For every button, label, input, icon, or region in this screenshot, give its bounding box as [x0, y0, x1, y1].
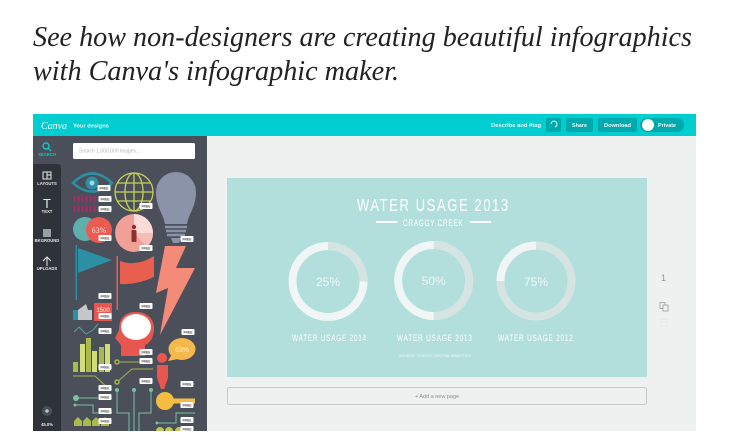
- free badges: FREE: [141, 204, 151, 208]
- icon: venn percent: [73, 217, 112, 243]
- free badges: FREE: [141, 304, 151, 308]
- sidebar tabs: TEXT: [42, 209, 53, 214]
- top toolbar: Your designs: [73, 124, 109, 130]
- free badges: FREE: [100, 197, 110, 201]
- top toolbar: Canva: [41, 120, 67, 132]
- free badges: FREE: [100, 395, 110, 399]
- search box: [73, 143, 195, 159]
- bar chart: [73, 338, 110, 372]
- icon: venn percent: 63%: [92, 226, 107, 235]
- icon: teal flag: [76, 245, 112, 300]
- donut labels: WATER USAGE 2012: [498, 333, 573, 343]
- icon: red counter: [94, 303, 112, 321]
- free badges: FREE: [182, 382, 192, 386]
- icon: red counter: 1500: [96, 308, 110, 314]
- heading text: with Canva's infographic maker.: [33, 56, 399, 87]
- free badges: FREE: [100, 207, 110, 211]
- icon: head silhouette: [115, 312, 154, 356]
- donut chart: 75%: [500, 246, 572, 316]
- top toolbar: [33, 114, 696, 136]
- icon: red person: [157, 353, 168, 389]
- circuit lines: [73, 360, 195, 431]
- top toolbar: Share: [572, 123, 587, 129]
- add a new page button: + Add a new page: [415, 394, 459, 400]
- infographic title: WATER USAGE 2013: [357, 196, 508, 216]
- sidebar tabs: 45.0%: [41, 422, 53, 427]
- free badges: FREE: [182, 237, 192, 241]
- icon: eye: [73, 174, 112, 192]
- free badges: FREE: [183, 330, 193, 334]
- top toolbar: Private: [658, 123, 676, 129]
- free badges: FREE: [141, 359, 151, 363]
- source note: SOURCE: CRAGGY CENTRAL ANALYTICS: [399, 354, 471, 358]
- free badges: FREE: [100, 294, 110, 298]
- icon: key: [156, 392, 195, 410]
- free badges: FREE: [182, 418, 192, 422]
- page controls: [660, 273, 668, 326]
- free badges: FREE: [182, 403, 192, 407]
- icon: olive coins: [156, 427, 180, 431]
- free badges: FREE: [100, 329, 110, 333]
- icon: light bulb: [156, 172, 196, 243]
- icon: speech bubble: [168, 338, 196, 361]
- free badges: FREE: [100, 236, 110, 240]
- icon: line chart: [74, 324, 98, 334]
- free badges: FREE: [100, 409, 110, 413]
- free badges: FREE: [141, 379, 151, 383]
- donut chart: 75%: 75%: [524, 275, 548, 289]
- subtitle: Craggy Creek: [376, 220, 491, 226]
- free badges: FREE: [100, 314, 110, 318]
- sidebar tabs: BKGROUND: [35, 238, 59, 243]
- heading text: See how non-designers are creating beautiful infographics: [33, 22, 692, 53]
- add a new page button: [228, 388, 646, 404]
- icon: people rows: [73, 199, 98, 209]
- donut chart: 50%: 50%: [422, 274, 446, 288]
- icon: globe: [115, 173, 153, 211]
- subtitle: Craggy Creek: CRAGGY CREEK: [403, 218, 463, 228]
- objects panel: [33, 136, 207, 435]
- donut labels: [292, 334, 572, 341]
- icon: lightning bolt: [156, 246, 195, 335]
- sidebar tabs: LAYOUTS: [37, 181, 57, 186]
- top toolbar: Describe and #tag: [491, 123, 541, 129]
- free badges: FREE: [100, 365, 110, 369]
- donut labels: WATER USAGE 2013: [397, 333, 472, 343]
- icon: speech bubble: 63%: [175, 347, 189, 354]
- icon: pie with person: [115, 214, 153, 252]
- editor screenshot: [33, 114, 696, 435]
- free badges: FREE: [100, 386, 110, 390]
- donut chart: 25%: 25%: [316, 275, 340, 289]
- donut chart: 25%: [292, 246, 364, 317]
- search box: Search 1,000,000 images...: [79, 148, 140, 154]
- sidebar tabs: SEARCH: [38, 152, 56, 157]
- top toolbar: Download: [604, 123, 631, 129]
- free badges: FREE: [182, 427, 192, 431]
- free badges: [98, 185, 194, 432]
- icon: thumbs up: [73, 304, 92, 320]
- donut labels: WATER USAGE 2014: [292, 333, 367, 343]
- sidebar tabs: UPLOADS: [37, 266, 57, 271]
- free badges: FREE: [141, 246, 151, 250]
- free badges: FREE: [141, 350, 151, 354]
- donut chart: 50%: [398, 245, 469, 316]
- page controls: 1: [661, 273, 666, 283]
- canvas: water usage infographic: [227, 178, 647, 377]
- icon: red flag: [116, 256, 154, 310]
- sidebar tabs: T: [43, 196, 51, 211]
- heading text: [33, 22, 692, 87]
- free badges: FREE: [99, 186, 109, 190]
- sidebar tabs: [33, 143, 61, 431]
- icon: houses: [74, 417, 109, 426]
- free badges: FREE: [100, 419, 110, 423]
